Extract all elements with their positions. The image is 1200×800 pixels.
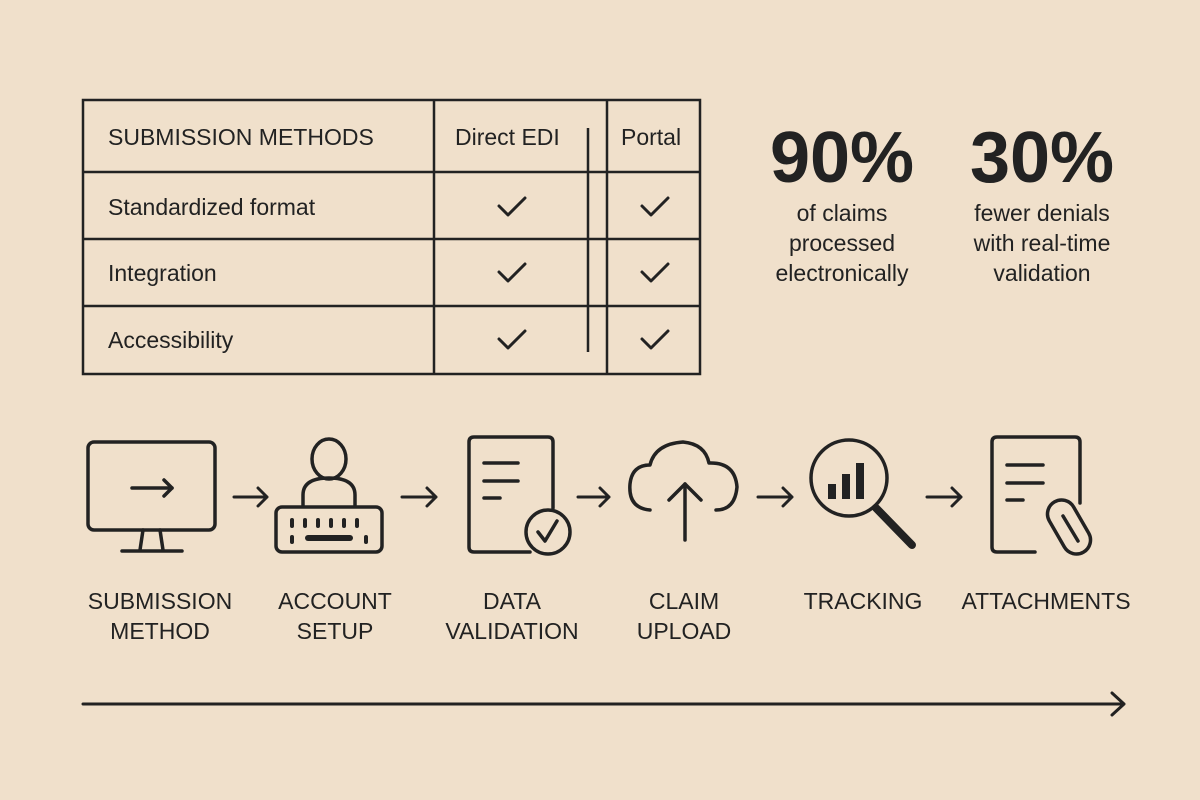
icon: document check — [469, 437, 570, 554]
step labels: SUBMISSION — [88, 588, 232, 614]
icon: cloud upload — [630, 442, 737, 540]
comparison table: Portal — [621, 124, 681, 150]
stat 30%: 30% — [970, 118, 1114, 198]
stat 30%: with real-time — [974, 230, 1110, 256]
text: CLAIM — [649, 588, 719, 614]
stat 90% — [770, 118, 914, 286]
timeline arrow — [83, 693, 1124, 715]
step labels: METHOD — [110, 618, 210, 644]
comparison table: Accessibility — [108, 327, 234, 353]
text: SETUP — [297, 618, 373, 644]
icon: monitor — [88, 442, 215, 551]
arrows between steps — [234, 488, 961, 506]
stat 30%: fewer denials — [974, 200, 1110, 226]
icon: magnifier chart — [811, 440, 912, 545]
text: ATTACHMENTS — [961, 588, 1131, 614]
comparison table: Direct EDI — [455, 124, 560, 150]
stat 90%: electronically — [776, 260, 908, 286]
stat 30% — [970, 118, 1114, 286]
comparison table: Integration — [108, 260, 217, 286]
text: UPLOAD — [637, 618, 731, 644]
text: TRACKING — [804, 588, 922, 614]
stat 90%: processed — [789, 230, 895, 256]
stat 30%: validation — [993, 260, 1091, 286]
text: ACCOUNT — [278, 588, 392, 614]
icon: person keyboard — [276, 439, 382, 552]
stat 90%: of claims — [797, 200, 887, 226]
comparison table: Standardized format — [108, 194, 316, 220]
icon: document attachment — [992, 437, 1096, 559]
step labels — [88, 588, 232, 644]
text: VALIDATION — [445, 618, 579, 644]
stat 90%: 90% — [770, 118, 914, 198]
comparison table: SUBMISSION METHODS — [108, 124, 374, 150]
text: DATA — [483, 588, 541, 614]
